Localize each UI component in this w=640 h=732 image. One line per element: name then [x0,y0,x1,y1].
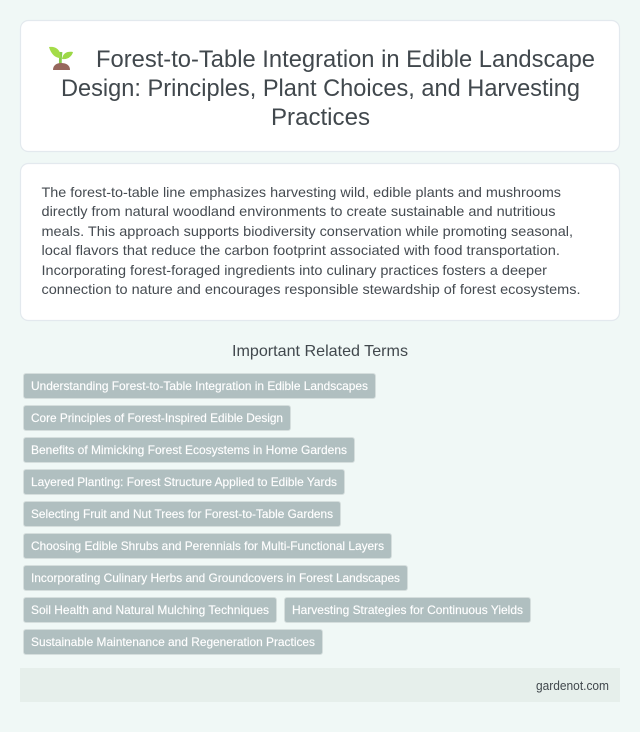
title: Forest-to-Table Integration in Edible Landscape [96,47,595,73]
chip [24,630,322,654]
chip [24,502,340,526]
chip: Layered Planting: Forest Structure Applied to Edible Yards [31,475,337,489]
text block: description: directly from natural woodland environments to create sustainable and nutritious [42,203,556,219]
footer source text: gardenot.com [536,678,609,693]
title: Design: Principles, Plant Choices, and Harvesting [61,76,580,102]
chip: Sustainable Maintenance and Regeneration Practices [31,635,315,649]
chip [24,598,276,622]
text block: description [42,184,580,297]
chip: Harvesting Strategies for Continuous Yields [292,603,523,617]
panel: description [20,164,620,320]
chip [284,598,530,622]
chip: Soil Health and Natural Mulching Techniques [31,603,269,617]
title: Practices [271,105,370,131]
text block: description: meals. This approach supports biodiversity conservation while promoting seasonal, [42,223,573,239]
icon: seedling [49,47,73,70]
chip: Selecting Fruit and Nut Trees for Forest-to-Table Gardens [31,507,333,521]
panel: title card [20,20,620,152]
chip [24,406,290,430]
title [61,47,595,131]
text block: description: Incorporating forest-foraged ingredients into culinary practices fosters a deeper [42,262,547,278]
chip: Choosing Edible Shrubs and Perennials for Multi-Functional Layers [31,539,384,553]
heading: related terms: Important Related Terms [232,343,408,360]
chip [24,566,408,590]
chip [24,438,354,462]
chip: Incorporating Culinary Herbs and Groundcovers in Forest Landscapes [31,571,400,585]
text block: description: local flavors that reduce the carbon footprint associated with food transportation. [42,242,560,258]
chip: Core Principles of Forest-Inspired Edible Design [31,411,283,425]
chip: Understanding Forest-to-Table Integration in Edible Landscapes [31,379,368,393]
chip [24,374,376,398]
chip [24,534,392,558]
related terms chips [24,374,530,654]
chip: Benefits of Mimicking Forest Ecosystems in Home Gardens [31,443,347,457]
text block: description: connection to nature and encourages responsible stewardship of forest ecosystems. [42,281,580,297]
chip [24,470,344,494]
text block: description: The forest-to-table line emphasizes harvesting wild, edible plants and mushrooms [42,184,561,200]
footer bar [20,668,620,702]
